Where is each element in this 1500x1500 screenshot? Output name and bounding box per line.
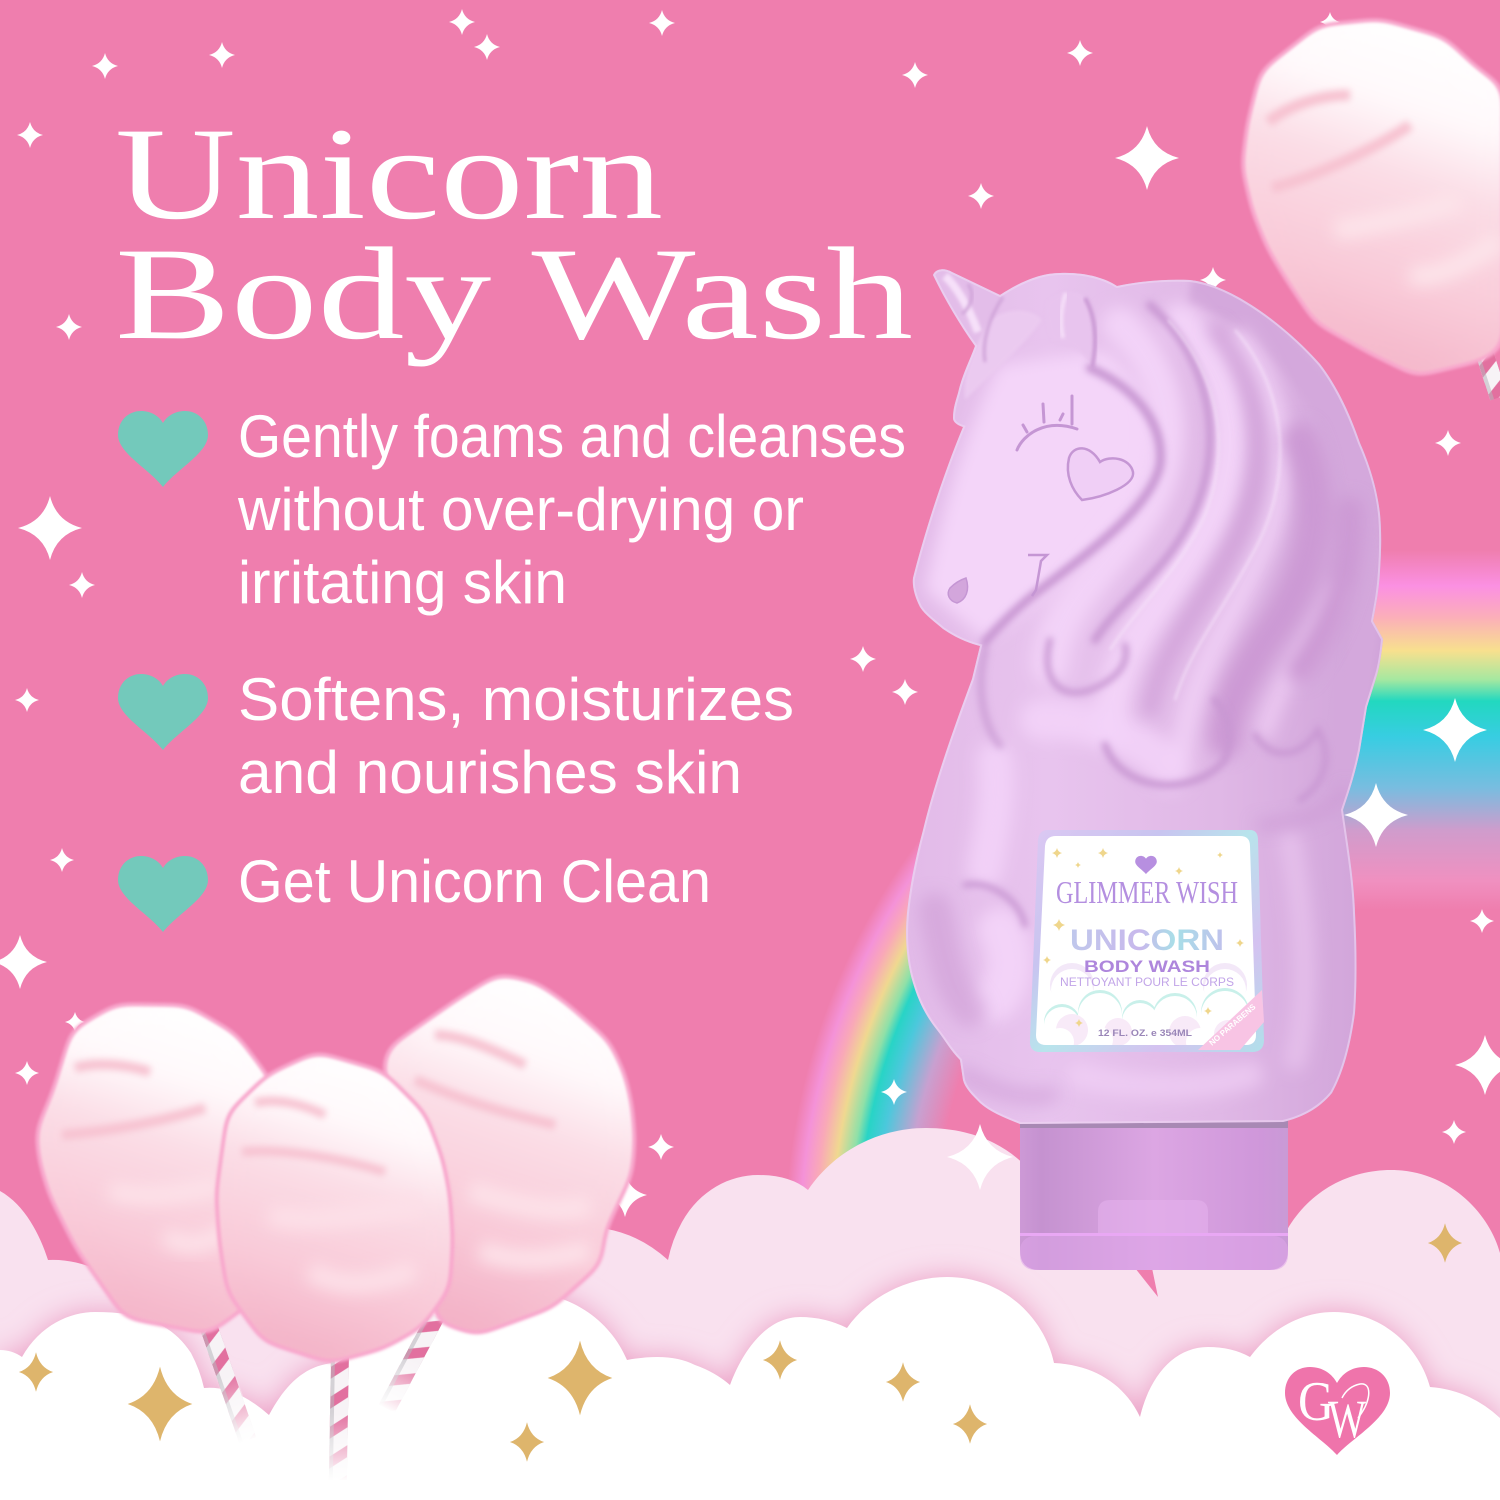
stick: top right [1475,349,1500,400]
benefit 1: Gently foams and cleanses [238,403,906,470]
stick: right [377,1311,445,1414]
stick: left [198,1319,257,1444]
label body wash: BODY WASH [1084,957,1210,976]
benefit 3 [118,848,711,932]
cloud wedge under cap [1135,1268,1158,1297]
candy floss: middle [219,1055,450,1360]
candy floss: top right [1245,22,1500,373]
stick: middle [328,1355,350,1481]
bottle cap [1020,1120,1288,1270]
icon: teal heart [118,856,208,932]
mane thin highlights [1110,320,1280,700]
label volume: 12 FL. OZ. e 354ML [1098,1028,1193,1038]
cotton candy trio [39,977,632,1481]
benefit 1 [118,403,906,616]
benefit 2: Softens, moisturizes [238,666,794,733]
cotton candy top right [1245,22,1500,400]
rainbow [760,550,1500,1300]
foreground sparkle [947,1124,1013,1190]
brand heart logo [1285,1367,1390,1455]
brand heart logo: W [1328,1389,1366,1449]
product label [1030,830,1264,1058]
label sparkles [1043,848,1244,1027]
no parabens ribbon [1198,990,1264,1050]
benefit 3: Get Unicorn Clean [238,848,711,915]
horn [942,273,1000,334]
mane light strands [985,320,1335,1086]
body outline rim [906,269,1383,1124]
front white clouds [0,1277,1500,1500]
label brand: GLIMMER WISH [1056,874,1238,910]
face highlight [925,350,1158,640]
label product name: UNICORN [1070,924,1224,957]
forelock [965,296,1034,396]
title [115,100,913,367]
icon: teal heart [118,674,208,750]
label french text: NETTOYANT POUR LE CORPS [1060,975,1234,989]
icon: teal heart [118,411,208,487]
ear [1060,292,1098,367]
heart cheek mark [1068,448,1133,500]
benefit 2 [118,666,794,806]
brand heart logo: G [1298,1371,1334,1433]
label clouds [1044,963,1248,1045]
eye lashes [1017,396,1077,450]
candy floss: right [386,977,632,1332]
candy floss: left [39,1007,285,1331]
no parabens ribbon: NO PARABENS [1207,1002,1258,1048]
title: Body Wash [115,220,913,367]
mane broad shadow [935,330,1350,1097]
outer mane rim [1190,290,1368,790]
bottle body [900,260,1390,1140]
benefit 1: irritating skin [238,549,567,616]
unicorn bottle [900,260,1390,1270]
back cloud layer [0,1128,1500,1500]
gold sparkles on clouds [19,1223,1462,1462]
nostril [948,578,968,603]
benefit 1: without over-drying or [237,476,804,543]
mouth mark [1028,555,1047,596]
benefit 2: and nourishes skin [238,739,742,806]
mane dark strands [965,305,1325,925]
label heart logo [1135,856,1157,874]
title: Unicorn [115,100,663,247]
